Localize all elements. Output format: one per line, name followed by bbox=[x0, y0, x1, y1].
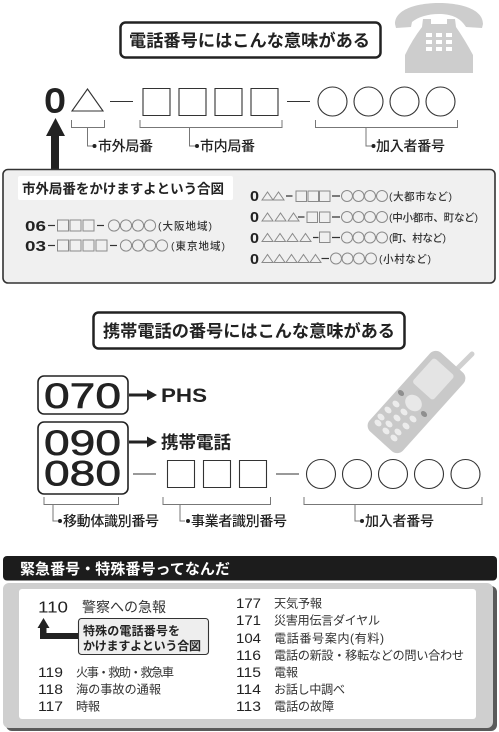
pattern: major city bbox=[250, 188, 452, 205]
entry 116: 電話の新設・移転などの問い合わせ bbox=[274, 648, 464, 662]
label: local code: 市内局番 bbox=[200, 138, 255, 154]
arrow: to mobile phone bbox=[129, 436, 157, 448]
entry 114: 114 bbox=[236, 681, 261, 697]
entry 171: 171 bbox=[236, 612, 261, 628]
operator squares bbox=[168, 460, 266, 488]
entry 116: 116 bbox=[236, 647, 261, 663]
subscriber circles bbox=[318, 87, 455, 116]
entry 171: 災害用伝言ダイヤル bbox=[274, 612, 380, 628]
entry 104: 電話番号案内(有料) bbox=[274, 632, 384, 646]
heading: landline number meaning bbox=[120, 22, 380, 58]
label: operator identifier: 事業者識別番号 bbox=[191, 513, 287, 529]
arrow: up to leading zero bbox=[46, 118, 65, 170]
callout: special number signal: かけますよという合図 bbox=[83, 638, 201, 653]
entry 117 bbox=[38, 698, 100, 714]
landline number format diagram bbox=[45, 82, 458, 146]
pattern: mid-size city bbox=[250, 209, 478, 226]
entry 114: お話し中調べ bbox=[274, 682, 345, 696]
pattern: town or village bbox=[250, 230, 446, 247]
label: area code: 市外局番 bbox=[98, 138, 153, 154]
callout: special number signal: 特殊の電話番号を bbox=[83, 623, 180, 638]
example: Osaka bbox=[25, 218, 212, 235]
pattern: major city: 0 bbox=[250, 188, 259, 205]
entry 113: 113 bbox=[236, 698, 261, 714]
subscriber circles bbox=[306, 460, 480, 488]
pattern: small village: (小村など) bbox=[379, 252, 431, 266]
mobile number format diagram bbox=[44, 460, 482, 521]
bracket leaders bbox=[72, 120, 458, 146]
label: subscriber number: 加入者番号 bbox=[376, 138, 445, 154]
panel: area code signal bbox=[3, 170, 495, 283]
entry 118: 118 bbox=[38, 681, 63, 697]
entry 115 bbox=[236, 664, 298, 680]
entry 110: 警察への急報 bbox=[82, 599, 166, 615]
arrow: to 110 bbox=[38, 618, 79, 639]
entry 119 bbox=[38, 664, 174, 680]
entry 113 bbox=[236, 698, 334, 714]
entry 104 bbox=[236, 630, 384, 646]
entry 119: 119 bbox=[38, 664, 63, 680]
label: subscriber number: 加入者番号 bbox=[365, 513, 434, 529]
label: mobile identifier: 移動体識別番号 bbox=[63, 513, 159, 529]
dash bbox=[110, 100, 310, 102]
heading: landline number meaning: 電話番号にはこんな意味がある bbox=[129, 30, 370, 50]
entry 115: 電報 bbox=[274, 666, 298, 680]
heading bar: emergency and special numbers: 緊急番号・特殊番号ってなんだ bbox=[20, 560, 230, 578]
pattern: town or village: (町、村など) bbox=[389, 232, 446, 244]
box: 090 and 080 prefixes bbox=[38, 422, 128, 494]
pattern: mid-size city: (中小都市、町など) bbox=[389, 211, 478, 224]
entry 110 bbox=[38, 599, 166, 616]
panel shadow bbox=[6, 586, 497, 731]
heading bar: emergency and special numbers bbox=[3, 556, 497, 580]
box: 070 prefix bbox=[38, 376, 128, 416]
icon: mobile phone bbox=[364, 348, 472, 456]
example: Osaka: 06 bbox=[25, 218, 46, 235]
bracket leaders bbox=[44, 497, 482, 521]
pattern: small village bbox=[250, 251, 431, 268]
leading zero: 0 bbox=[45, 82, 65, 119]
entry 118 bbox=[38, 681, 161, 697]
pattern: major city: (大都市など) bbox=[389, 190, 452, 203]
example: Tokyo: 03 bbox=[25, 238, 46, 255]
label: mobile phone: 携帯電話 bbox=[161, 432, 232, 452]
entry 117: 117 bbox=[38, 698, 63, 714]
entry 117: 時報 bbox=[76, 700, 100, 714]
entry 177: 177 bbox=[236, 595, 261, 611]
example: Tokyo bbox=[25, 238, 225, 255]
heading: mobile number meaning: 携帯電話の番号にはこんな意味がある bbox=[103, 321, 395, 341]
white inner card bbox=[19, 589, 476, 719]
entry 118: 海の事故の通報 bbox=[76, 682, 161, 696]
box: 070 prefix: 070 bbox=[44, 377, 121, 416]
entry 171 bbox=[236, 612, 380, 628]
area code triangle bbox=[72, 89, 103, 111]
panel: special numbers bbox=[3, 583, 497, 731]
pattern: town or village: 0 bbox=[250, 230, 259, 247]
panel heading bbox=[18, 176, 233, 200]
arrow: to PHS bbox=[129, 390, 157, 400]
panel heading: 市外局番をかけますよという合図 bbox=[22, 180, 224, 196]
pattern: small village: 0 bbox=[250, 251, 259, 268]
icon: desk telephone bbox=[395, 3, 483, 73]
entry 113: 電話の故障 bbox=[274, 698, 334, 714]
box: 090 and 080 prefixes: 080 bbox=[44, 454, 121, 494]
callout: special number signal bbox=[78, 618, 208, 654]
entry 177 bbox=[236, 595, 322, 611]
heading: mobile number meaning bbox=[94, 312, 404, 348]
pattern: mid-size city: 0 bbox=[250, 209, 259, 226]
entry 177: 天気予報 bbox=[274, 596, 322, 610]
local code squares bbox=[143, 88, 278, 116]
box: 090 and 080 prefixes: 090 bbox=[44, 424, 121, 463]
entry 114 bbox=[236, 681, 345, 697]
example: Tokyo: (東京地域) bbox=[171, 240, 225, 252]
entry 115: 115 bbox=[236, 664, 261, 680]
label: PHS: PHS bbox=[161, 386, 207, 407]
entry 110: 110 bbox=[38, 600, 68, 616]
entry 119: 火事・救助・救急車 bbox=[76, 664, 174, 680]
example: Osaka: (大阪地域) bbox=[158, 220, 212, 232]
entry 104: 104 bbox=[236, 630, 261, 646]
